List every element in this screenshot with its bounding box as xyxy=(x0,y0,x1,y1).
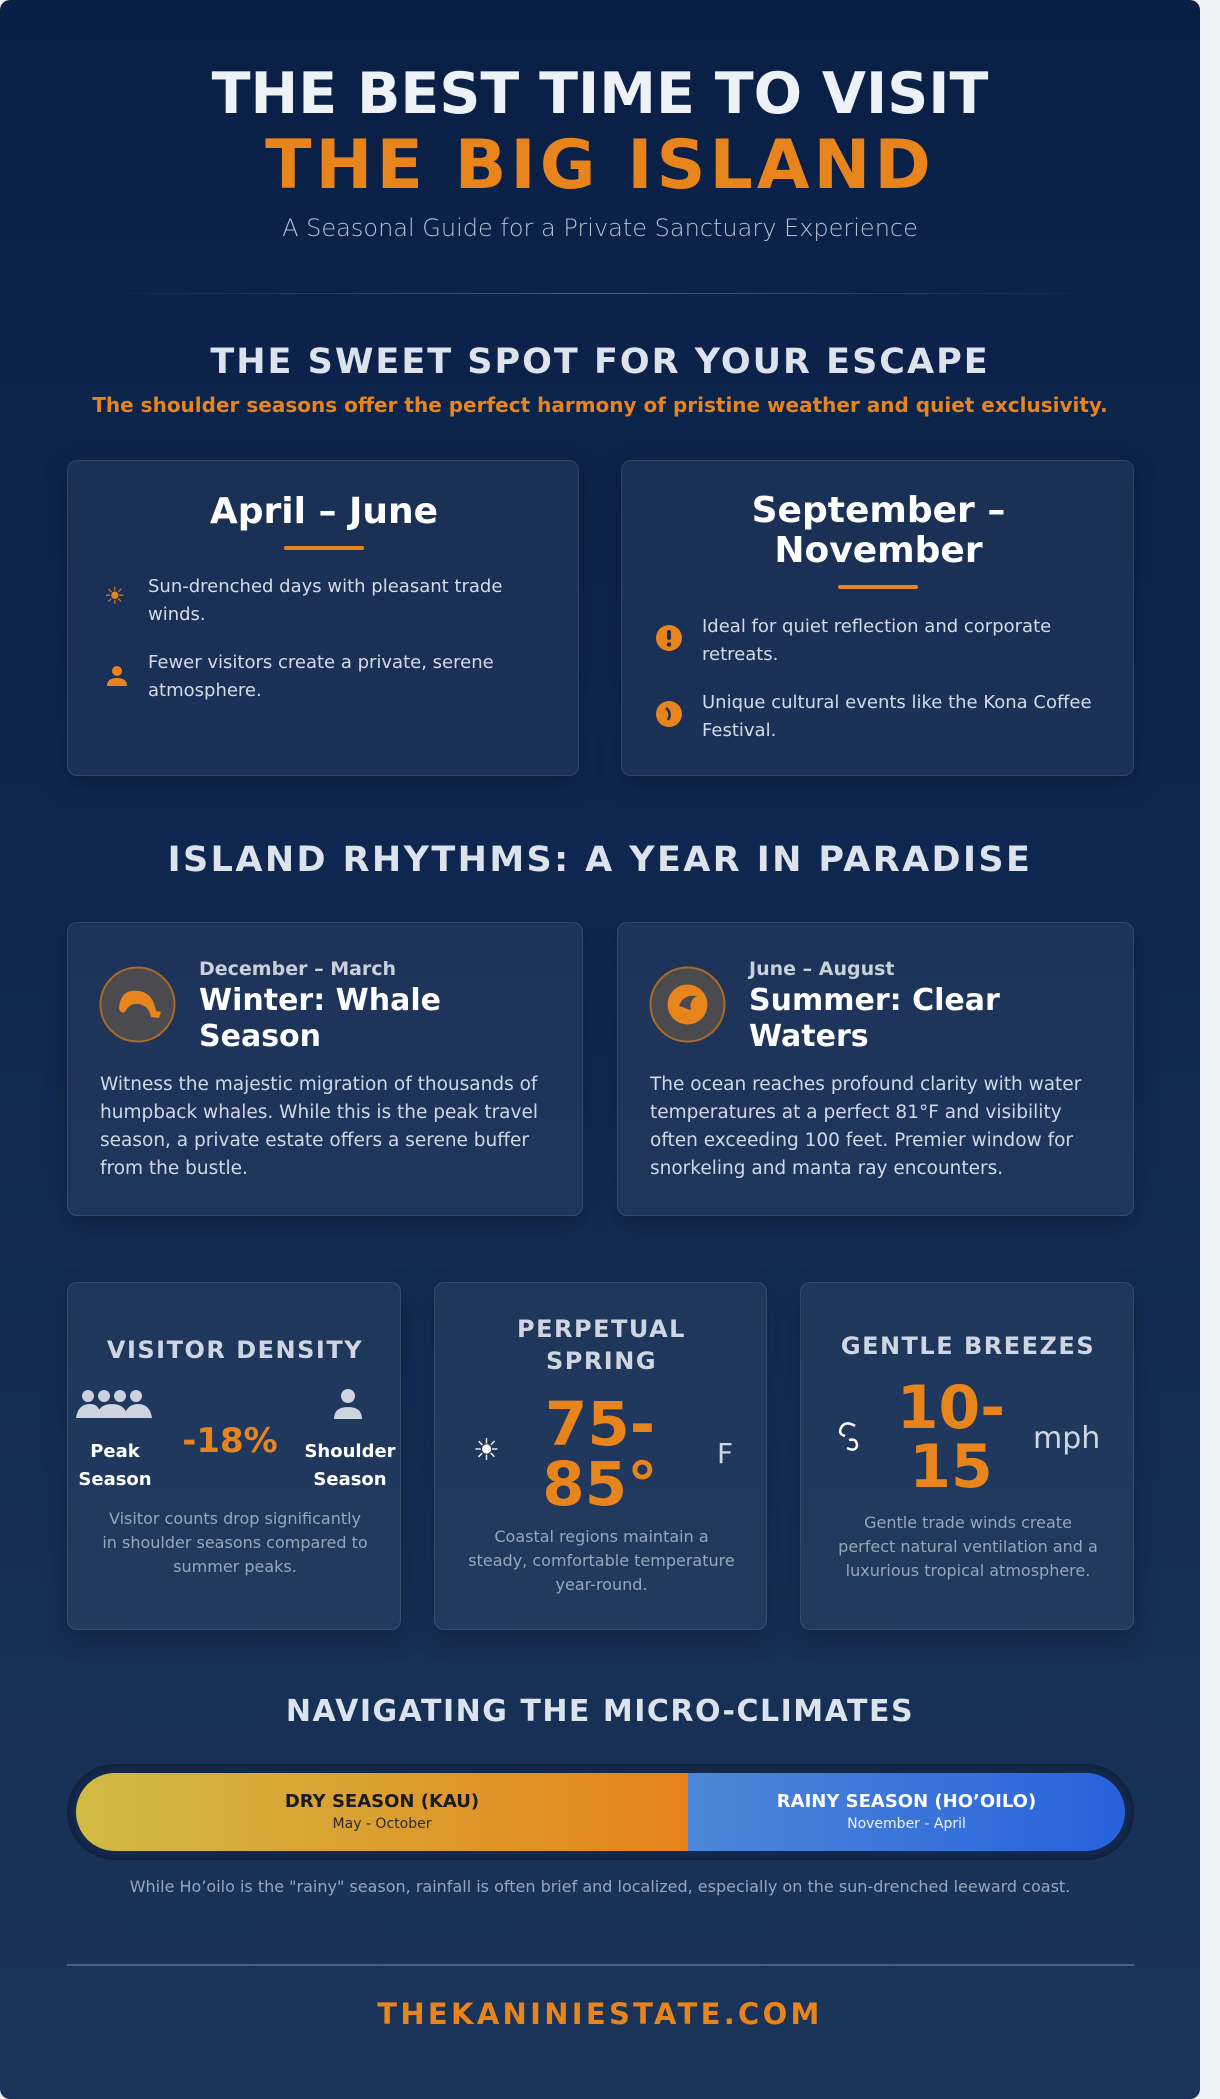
season title xyxy=(749,983,1000,1054)
panel: perpetual spring xyxy=(434,1282,767,1630)
icon: person xyxy=(334,1389,362,1419)
bullet 1: Sun-drenched days with pleasant trade winds. xyxy=(148,576,502,625)
panel: summer xyxy=(617,922,1134,1216)
bullet 1: Ideal for quiet reflection and corporate retreats. xyxy=(702,616,1051,665)
label: peak season xyxy=(78,1441,152,1490)
panel: winter xyxy=(67,922,583,1216)
stat: wind speed xyxy=(897,1373,1005,1502)
stat title xyxy=(517,1315,686,1375)
note: While Ho’oilo is the "rainy" season, rainfall is often brief and localized, especially on the sun-drenched leeward coast. xyxy=(130,1877,1070,1896)
rainy season segment xyxy=(688,1773,1125,1851)
heading: island rhythms: ISLAND RHYTHMS: A YEAR IN PARADISE xyxy=(168,840,1032,880)
icon: whale xyxy=(100,966,176,1042)
icon: person xyxy=(107,666,127,686)
subtitle: A Seasonal Guide for a Private Sanctuary Experience xyxy=(282,214,918,242)
stat: -18%: -18% xyxy=(182,1421,278,1461)
unit F: F xyxy=(717,1437,733,1470)
rainy season segment: RAINY SEASON (HO’OILO) xyxy=(777,1791,1036,1812)
label: shoulder season: Season xyxy=(313,1469,387,1490)
title xyxy=(212,61,988,205)
label: shoulder season: Shoulder xyxy=(304,1441,396,1462)
description: perfect natural ventilation and a luxurious tropical atmosphere. xyxy=(838,1537,1098,1580)
card title: September – xyxy=(752,490,1005,531)
stat title: GENTLE BREEZES xyxy=(841,1332,1095,1360)
icon: water xyxy=(650,966,726,1042)
season title: Winter: Whale xyxy=(199,983,441,1018)
card title xyxy=(752,490,1005,571)
season date: December – March xyxy=(199,958,396,980)
stat: temperature xyxy=(542,1389,658,1520)
subheading: shoulder seasons: The shoulder seasons offer the perfect harmony of pristine weather and quiet exclusivity. xyxy=(92,393,1108,417)
panel: visitor density xyxy=(67,1282,401,1630)
unit mph: mph xyxy=(1033,1421,1100,1456)
title: THE BIG ISLAND xyxy=(265,126,935,205)
icon: coffee xyxy=(656,701,682,727)
icon: crowd xyxy=(76,1390,152,1418)
panel: September – November xyxy=(621,460,1134,776)
description: Gentle trade winds create xyxy=(864,1513,1072,1532)
season date: June – August xyxy=(749,958,894,980)
label: peak season: Peak xyxy=(90,1441,140,1462)
stat: wind speed: 10- xyxy=(897,1373,1005,1443)
panel: gentle breezes xyxy=(800,1282,1134,1630)
rainy season segment: November - April xyxy=(847,1816,966,1832)
season title: Summer: Clear xyxy=(749,983,1000,1018)
stat: wind speed: 15 xyxy=(909,1432,993,1502)
icon: sun: ☀ xyxy=(104,582,126,610)
dry season segment: May - October xyxy=(333,1816,431,1832)
season title: Season xyxy=(199,1019,321,1054)
card title: November xyxy=(774,530,983,571)
panel: April – June xyxy=(67,460,579,776)
heading: sweet spot: THE SWEET SPOT FOR YOUR ESCAPE xyxy=(210,342,990,382)
description: Witness the majestic migration of thousands of humpback whales. While this is the peak travel season, a private estate offers a serene buffer from the bustle. xyxy=(100,1074,538,1179)
stat: temperature: 75- xyxy=(545,1389,655,1460)
dry season segment xyxy=(76,1773,688,1851)
stat title: SPRING xyxy=(546,1347,657,1375)
card title: April – June xyxy=(210,491,438,532)
description: Visitor counts drop significantly in shoulder seasons compared to summer peaks. xyxy=(102,1509,368,1576)
dry season segment: DRY SEASON (KAU) xyxy=(285,1791,479,1812)
icon: sun: ☀ xyxy=(473,1433,500,1468)
description: The ocean reaches profound clarity with water temperatures at a perfect 81°F and visibility often exceeding 100 feet. Premier window for snorkeling and manta ray encounters. xyxy=(650,1074,1081,1179)
footer: THEKANINIESTATE.COM xyxy=(377,1997,823,2031)
stat: temperature: 85° xyxy=(542,1449,658,1520)
icon: exclamation xyxy=(656,625,682,651)
season title xyxy=(199,983,441,1054)
description xyxy=(838,1513,1098,1580)
label: peak season: Season xyxy=(78,1469,152,1490)
icon: wind xyxy=(838,1422,858,1451)
description: Coastal regions maintain a steady, comfortable temperature year-round. xyxy=(468,1527,735,1594)
heading: micro-climates: NAVIGATING THE MICRO-CLIMATES xyxy=(286,1694,914,1729)
stat title: VISITOR DENSITY xyxy=(107,1336,363,1364)
season bar xyxy=(67,1764,1134,1860)
stat title: PERPETUAL xyxy=(517,1315,686,1343)
title: THE BEST TIME TO VISIT xyxy=(212,61,988,127)
bullet 2: Unique cultural events like the Kona Coffee Festival. xyxy=(702,692,1092,741)
season title: Waters xyxy=(749,1019,869,1054)
bullet 2: Fewer visitors create a private, serene atmosphere. xyxy=(148,652,494,701)
label: shoulder season xyxy=(304,1441,396,1490)
